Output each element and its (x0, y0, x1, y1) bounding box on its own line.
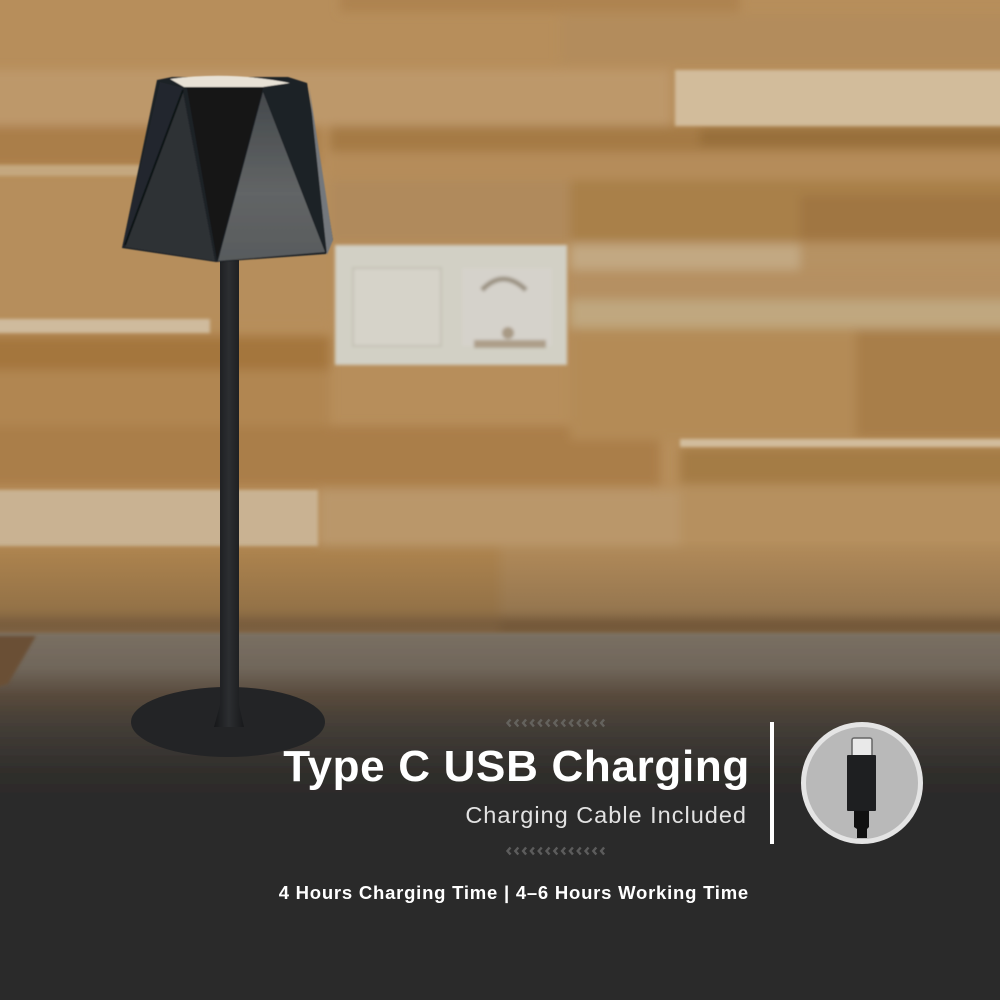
lamp base (131, 687, 325, 757)
lamp (122, 76, 333, 757)
icon: USB type C cable (801, 722, 923, 844)
charging and working time: 4 Hours Charging Time | 4–6 Hours Working Time (279, 882, 749, 903)
wood wall (0, 0, 1000, 660)
bottom chevron divider (506, 846, 605, 856)
top chevron divider (506, 718, 605, 728)
lamp shade (122, 76, 333, 262)
table top (0, 633, 1000, 810)
lamp stem (214, 260, 244, 727)
vertical divider (770, 722, 774, 844)
subheading: Charging Cable Included (465, 802, 747, 828)
heading: Type C USB Charging (283, 742, 750, 791)
wall socket panel (335, 245, 567, 365)
